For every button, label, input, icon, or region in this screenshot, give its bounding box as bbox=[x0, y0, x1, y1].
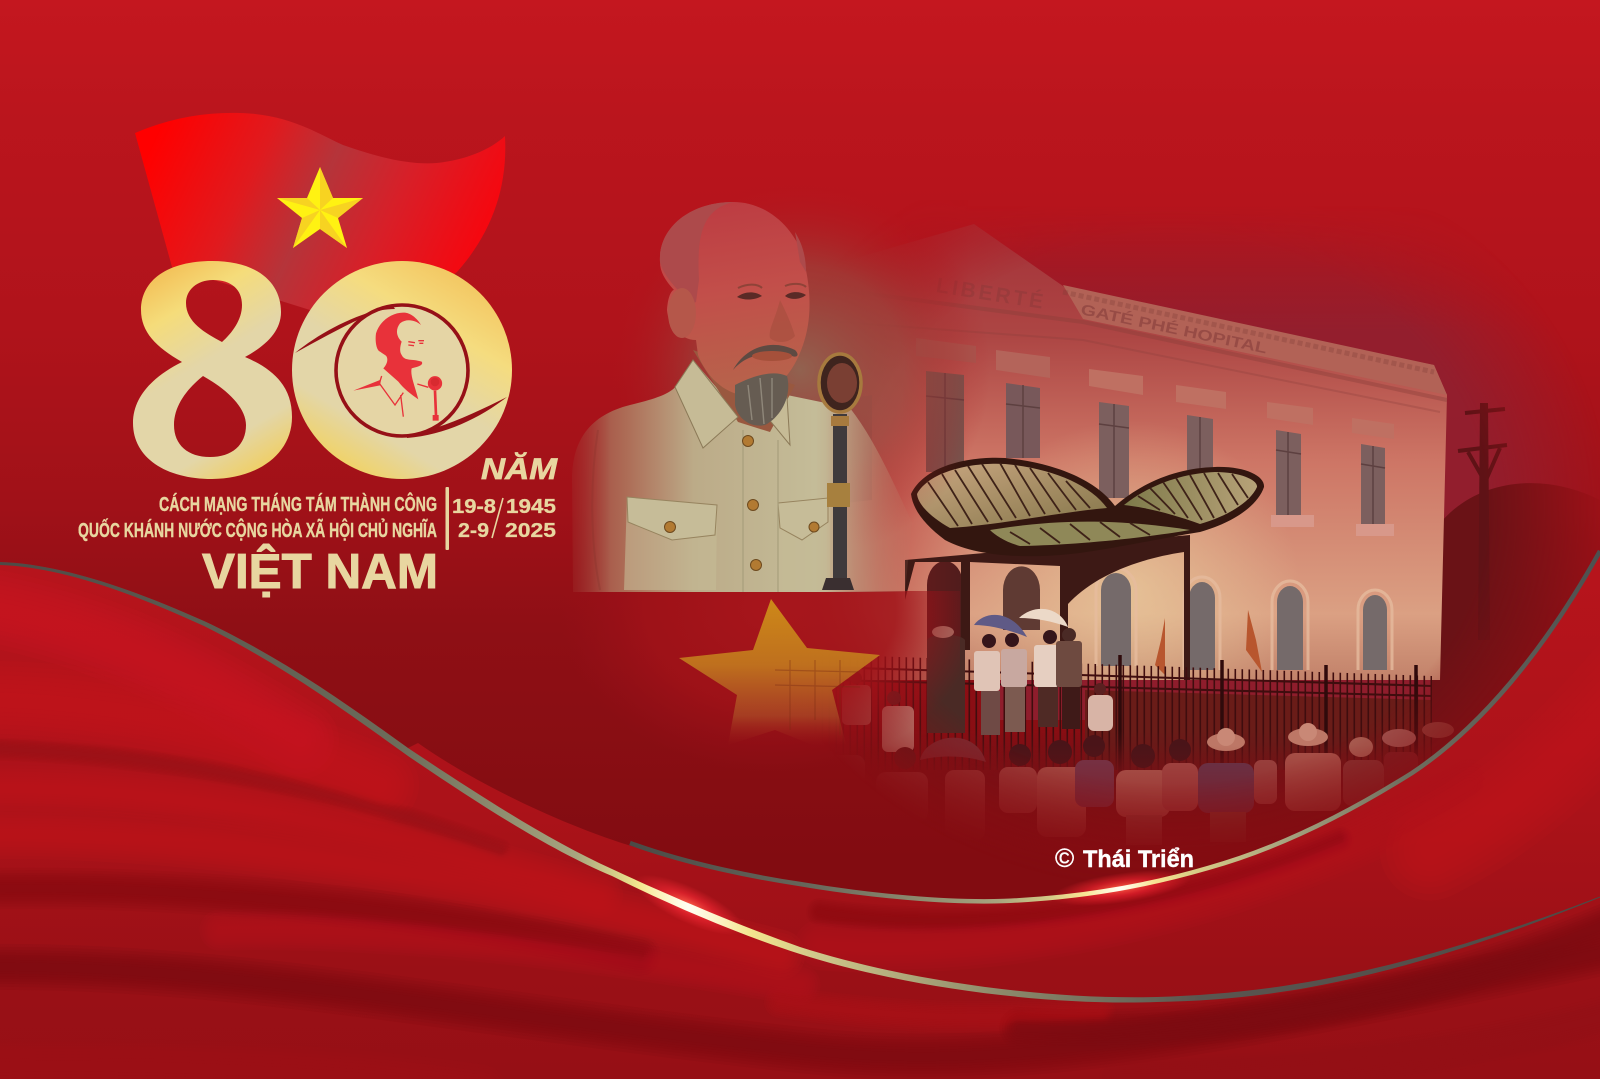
label: revolution line: CÁCH MẠNG THÁNG TÁM THÀNH CÔNG bbox=[159, 492, 437, 516]
ear bbox=[668, 288, 696, 338]
light flare left bbox=[627, 863, 751, 947]
pediment inscription: LIBERTÉ bbox=[935, 274, 1048, 314]
microphone bbox=[819, 354, 861, 590]
dates: 19-8 bbox=[452, 496, 496, 518]
ribbon fill bbox=[0, 540, 1600, 1079]
arched lower windows bbox=[1096, 568, 1392, 670]
frieze inscription: GATÉ PHÉ HOPITAL bbox=[1079, 301, 1269, 357]
dates bbox=[452, 496, 556, 542]
figure bbox=[572, 202, 912, 592]
hair bbox=[660, 202, 733, 305]
copyright credit: Thái Triển bbox=[1083, 846, 1194, 873]
crowd shadow base bbox=[898, 737, 1432, 810]
label: national day line: QUỐC KHÁNH NƯỚC CỘNG HÒA XÃ HỘI CHỦ NGHĨA bbox=[78, 518, 437, 542]
buttons bbox=[664, 436, 819, 570]
crowd at the gate bbox=[842, 608, 1454, 836]
date divider bbox=[446, 487, 449, 550]
head bbox=[660, 202, 810, 396]
label: NĂM: NĂM bbox=[481, 452, 558, 486]
eyes and nose bbox=[737, 292, 806, 300]
sky behind building bbox=[998, 234, 1560, 720]
numeral 8 bbox=[133, 261, 292, 479]
gold line: lower curve bbox=[0, 562, 1600, 1003]
logo: 80 years bbox=[78, 113, 558, 599]
numeral 0 with portrait bbox=[292, 261, 512, 479]
dates: 1945 bbox=[506, 496, 556, 518]
portrait icon bbox=[353, 313, 442, 421]
dates: 2-9 bbox=[458, 520, 489, 542]
left red wash over facade bbox=[840, 338, 956, 680]
waving flag bbox=[135, 113, 505, 330]
pockets bbox=[624, 497, 830, 590]
entrance doors bbox=[927, 562, 1040, 640]
upper windows bbox=[826, 338, 1394, 536]
shirt bbox=[572, 360, 912, 592]
label: VIỆT NAM: VIỆT NAM bbox=[202, 544, 438, 599]
yellow star bbox=[277, 167, 363, 248]
glass canopy bbox=[905, 458, 1264, 680]
national flag under portrait bbox=[618, 591, 960, 742]
portrait: Hồ Chí Minh speaking bbox=[572, 202, 912, 592]
sleeve seam bbox=[592, 430, 600, 590]
photo: August Revolution building and crowd bbox=[842, 224, 1592, 836]
beard bbox=[735, 373, 788, 426]
flag star bbox=[679, 599, 880, 736]
collar bbox=[675, 360, 738, 448]
flags at fence bbox=[1155, 610, 1262, 675]
red silk ribbons bbox=[0, 540, 1600, 1079]
light flare right bbox=[1050, 863, 1192, 913]
fade at bottom of photo bbox=[965, 759, 1366, 852]
neck bbox=[693, 350, 795, 432]
iron fence bbox=[842, 655, 1432, 773]
gold line: upper curve bbox=[630, 551, 1600, 901]
moustache and lips bbox=[733, 345, 798, 370]
copyright credit: © bbox=[1055, 843, 1074, 873]
building facade bbox=[842, 224, 1447, 680]
dates: 2025 bbox=[505, 520, 556, 542]
trees and utility pole bbox=[1432, 403, 1584, 750]
halo behind portrait bbox=[610, 180, 990, 560]
